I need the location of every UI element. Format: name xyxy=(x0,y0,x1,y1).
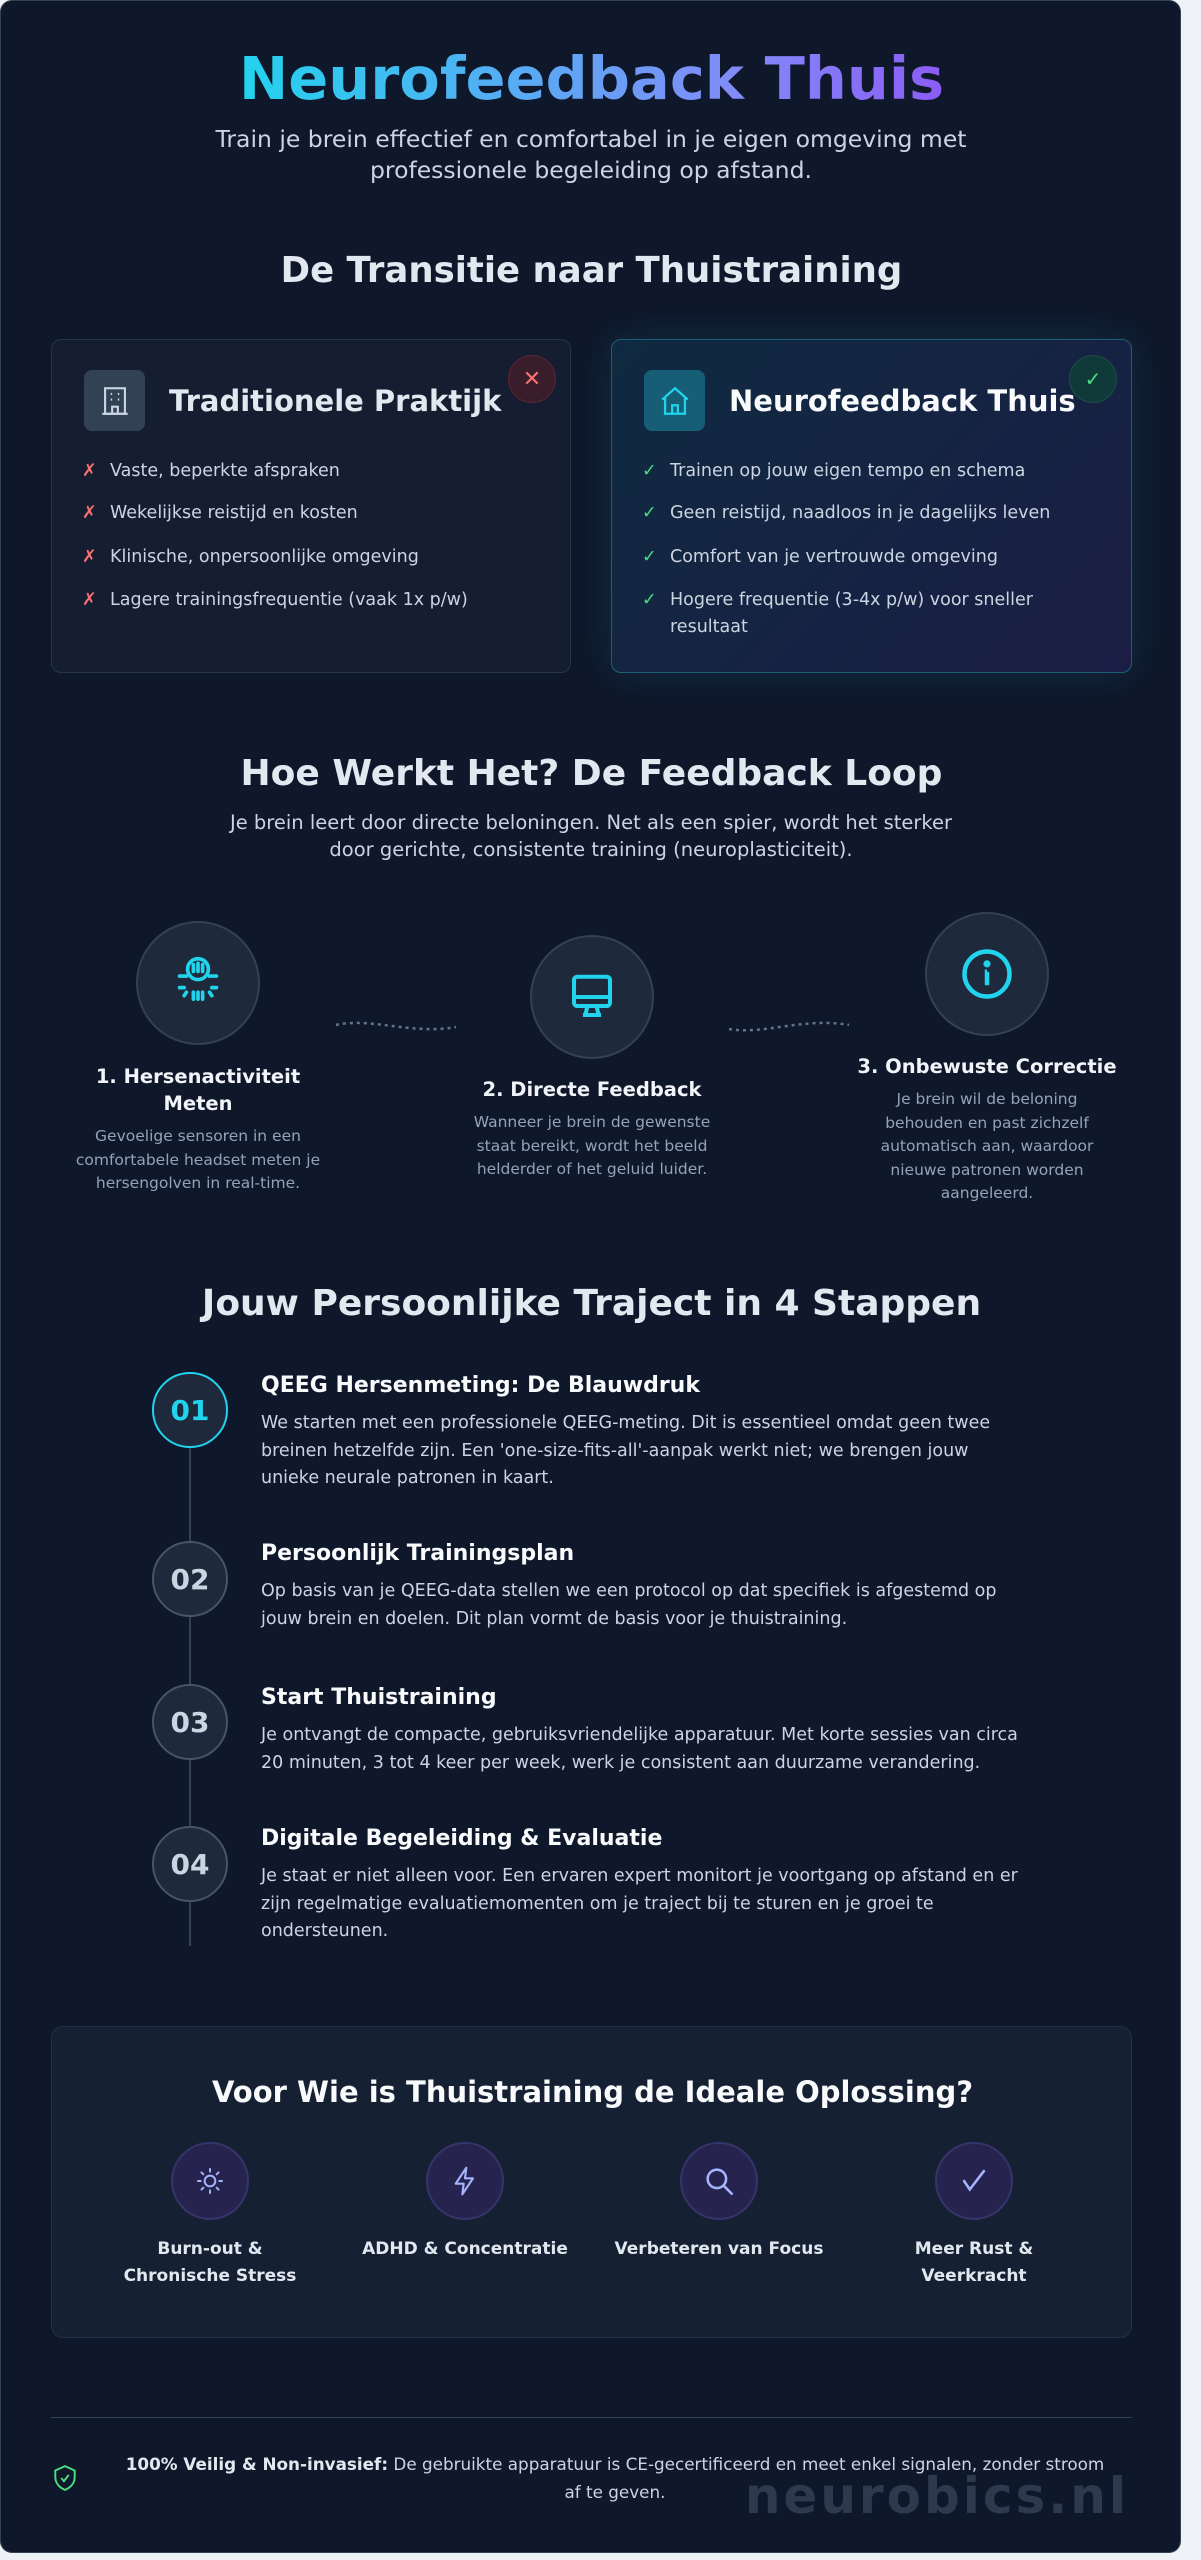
badge: check xyxy=(1069,355,1117,403)
list: cons: ✗ xyxy=(82,590,97,610)
step 2 text: 2. Directe Feedback xyxy=(483,1078,701,1101)
loop intro text: Je brein leert door directe beloningen. Net als een spier, wordt het sterker xyxy=(230,811,952,834)
step 02 text: Op basis van je QEEG-data stellen we een protocol op dat specifiek is afgestemd op jouw brein en doelen. Dit plan vormt de basis voor je thuistraining. xyxy=(261,1581,996,1629)
step 04 text: Digitale Begeleiding & Evaluatie xyxy=(261,1826,662,1851)
label: rust: Veerkracht xyxy=(921,2266,1027,2286)
step 2 text: Wanneer je brein de gewenste staat bereikt, wordt het beeld helderder of het geluid luider. xyxy=(474,1113,710,1178)
step 02 text: Persoonlijk Trainingsplan xyxy=(261,1541,574,1566)
footer note: af te geven. xyxy=(565,2482,665,2502)
list: pros xyxy=(642,461,1050,637)
step 03: 03 xyxy=(171,1706,209,1738)
label: burn-out: Burn-out & xyxy=(157,2239,263,2259)
panel: voor wie xyxy=(51,2026,1132,2338)
panel: neurofeedback thuis xyxy=(611,339,1132,673)
panel: traditionele praktijk xyxy=(51,339,571,673)
list: cons: Vaste, beperkte afspraken xyxy=(110,461,340,481)
list: pros: Comfort van je vertrouwde omgeving xyxy=(670,547,998,567)
icon: building xyxy=(84,370,145,431)
card title: Neurofeedback Thuis xyxy=(729,384,1076,418)
step 01 text xyxy=(261,1373,990,1488)
list: pros: ✓ xyxy=(642,590,657,610)
step 1 text xyxy=(76,1065,320,1192)
step 2 text xyxy=(474,1078,710,1178)
footer note: 100% Veilig & Non-invasief: De gebruikte apparatuur is CE-gecertificeerd en meet enkel signalen, zonder stroom xyxy=(126,2454,1104,2474)
step 01: 01 xyxy=(171,1394,209,1426)
list: pros: ✓ xyxy=(642,547,657,567)
icon: home xyxy=(644,370,705,431)
step 02: 02 xyxy=(171,1562,209,1596)
icon: shield xyxy=(54,2465,76,2491)
loop intro text: door gerichte, consistente training (neuroplasticiteit). xyxy=(329,838,853,861)
list: pros: resultaat xyxy=(670,617,748,637)
step 04 text: Je staat er niet alleen voor. Een ervaren expert monitort je voortgang op afstand en er zijn regelmatige evaluatiemomenten om je traject bij te sturen en je groei te ondersteunen. xyxy=(261,1866,1018,1941)
step 03 text xyxy=(260,1685,1018,1773)
icon: brain sensor xyxy=(136,921,260,1045)
icon: bolt xyxy=(426,2142,504,2220)
heading: Voor Wie is Thuistraining de Ideale Oplossing? xyxy=(212,2075,973,2109)
badge: x: ✕ xyxy=(523,366,541,392)
watermark: neurobics.nl xyxy=(745,2467,1129,2525)
step 03 text: Start Thuistraining xyxy=(261,1685,497,1710)
list: cons: ✗ xyxy=(82,547,97,567)
footer note xyxy=(126,2454,1104,2502)
heading: feedback loop: Hoe Werkt Het? De Feedback Loop xyxy=(241,753,942,794)
card title: Traditionele Praktijk xyxy=(169,384,501,418)
icon: info xyxy=(925,912,1049,1036)
step 03 xyxy=(152,1684,228,1760)
list: cons: ✗ xyxy=(82,503,97,523)
badge: x xyxy=(508,355,556,403)
icon: monitor xyxy=(530,935,654,1059)
list: cons: Wekelijkse reistijd en kosten xyxy=(110,503,358,523)
icon: sun xyxy=(171,2142,249,2220)
list: cons: ✗ xyxy=(82,461,97,481)
step 02 xyxy=(152,1541,228,1617)
list: pros: ✓ xyxy=(642,503,657,523)
title: Neurofeedback Thuis xyxy=(239,44,944,113)
step 03 text: Je ontvangt de compacte, gebruiksvriendelijke apparatuur. Met korte sessies van circa 20 minuten, 3 tot 4 keer per week, werk je consistent aan duurzame verandering. xyxy=(261,1725,1018,1773)
subtitle xyxy=(215,125,966,184)
step 04 xyxy=(152,1826,228,1902)
label: rust: Meer Rust & xyxy=(915,2239,1033,2259)
step 1 text: 1. Hersenactiviteit Meten xyxy=(96,1065,300,1115)
label: adhd: ADHD & Concentratie xyxy=(362,2239,568,2259)
step 02 text xyxy=(260,1541,996,1629)
step 01 xyxy=(152,1372,228,1448)
step 01 text: QEEG Hersenmeting: De Blauwdruk xyxy=(261,1373,700,1398)
list: cons: Klinische, onpersoonlijke omgeving xyxy=(110,547,419,567)
loop intro text xyxy=(229,811,952,861)
label: burn-out xyxy=(124,2239,296,2286)
label: focus: Verbeteren van Focus xyxy=(615,2239,823,2259)
list: pros: Trainen op jouw eigen tempo en schema xyxy=(670,461,1025,481)
list: cons: Lagere trainingsfrequentie (vaak 1x p/w) xyxy=(110,590,468,610)
icon: search xyxy=(680,2142,758,2220)
list: cons xyxy=(82,461,468,610)
step 01 text: We starten met een professionele QEEG-meting. Dit is essentieel omdat geen twee breinen hetzelfde zijn. Een 'one-size-fits-all'-aanpak werkt niet; we brengen jouw unieke neurale patronen in kaart. xyxy=(261,1413,990,1488)
connector 1 xyxy=(336,1022,456,1030)
step 3 text: 3. Onbewuste Correctie xyxy=(857,1055,1117,1078)
heading: traject: Jouw Persoonlijke Traject in 4 Stappen xyxy=(202,1283,981,1324)
list: pros: Geen reistijd, naadloos in je dagelijks leven xyxy=(670,503,1050,523)
step 04: 04 xyxy=(171,1848,209,1880)
badge: check: ✓ xyxy=(1085,367,1101,391)
connector 2 xyxy=(728,1022,850,1032)
step 04 text xyxy=(260,1826,1018,1941)
subtitle: Train je brein effectief en comfortabel in je eigen omgeving met xyxy=(215,125,966,153)
label: rust xyxy=(915,2239,1033,2286)
timeline xyxy=(152,1372,228,1946)
list: pros: Hogere frequentie (3-4x p/w) voor sneller xyxy=(670,590,1033,610)
step 1 text: Gevoelige sensoren in een comfortabele headset meten je hersengolven in real-time. xyxy=(76,1127,320,1192)
list: pros: ✓ xyxy=(642,461,657,481)
icon: check xyxy=(935,2142,1013,2220)
heading: transitie: De Transitie naar Thuistraining xyxy=(281,250,902,291)
step 3 text: Je brein wil de beloning behouden en past zichzelf automatisch aan, waardoor nieuwe patronen worden aangeleerd. xyxy=(881,1090,1093,1202)
step 3 text xyxy=(857,1055,1117,1202)
label: burn-out: Chronische Stress xyxy=(124,2266,296,2286)
subtitle: professionele begeleiding op afstand. xyxy=(370,156,812,184)
